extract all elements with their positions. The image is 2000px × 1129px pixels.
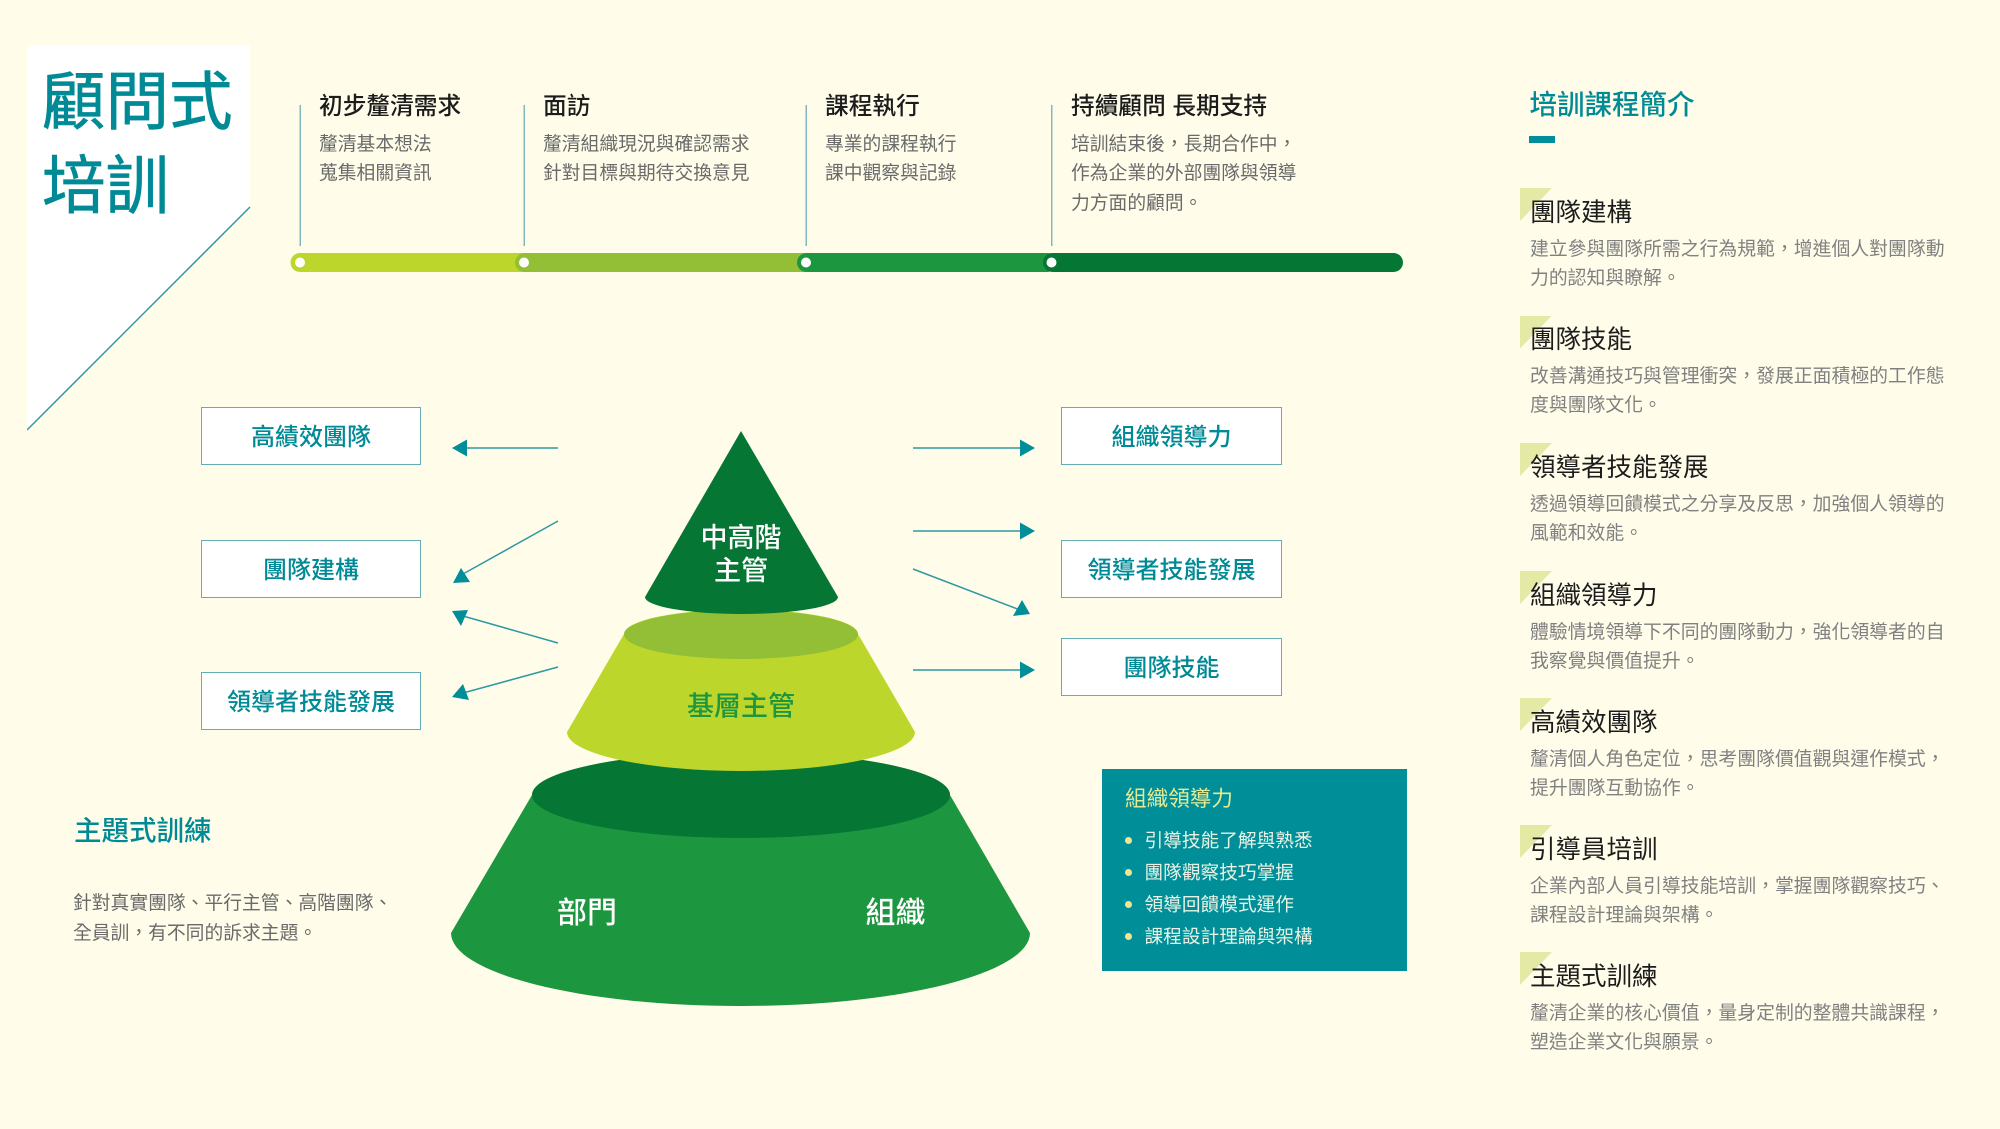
course: 主題式訓練 bbox=[1520, 952, 1945, 1052]
label: 組織: 組織 bbox=[866, 897, 926, 930]
arrow: base to 團隊建構 bbox=[452, 610, 558, 643]
step 3 bbox=[825, 94, 956, 183]
box: 領導者技能發展 right: 領導者技能發展 bbox=[1088, 556, 1256, 584]
course: 引導員培訓 bbox=[1520, 825, 1945, 924]
course: 主題式訓練: 主題式訓練 bbox=[1530, 962, 1658, 990]
step 4: 力方面的顧問。 bbox=[1071, 192, 1202, 212]
course: 引導員培訓: 引導員培訓 bbox=[1530, 836, 1658, 864]
course: 高績效團隊 bbox=[1520, 698, 1945, 798]
course: 組織領導力: 我察覺與價值提升。 bbox=[1530, 650, 1700, 670]
bullet list bbox=[1125, 830, 1313, 946]
heading: 主題式訓練 bbox=[74, 814, 212, 846]
course: 組織領導力 bbox=[1520, 571, 1945, 670]
label: 基層主管: 基層主管 bbox=[687, 692, 795, 722]
course: 領導者技能發展: 透過領導回饋模式之分享及反思，加強個人領導的 bbox=[1530, 492, 1945, 514]
course: 主題式訓練: 塑造企業文化與願景。 bbox=[1530, 1030, 1718, 1052]
box: 高績效團隊 bbox=[201, 407, 421, 465]
step 3: 專業的課程執行 bbox=[825, 132, 956, 154]
course: 團隊技能: 團隊技能 bbox=[1530, 326, 1632, 354]
box: 團隊技能: 團隊技能 bbox=[1124, 655, 1220, 682]
step 4 bbox=[1071, 94, 1296, 212]
description: 全員訓，有不同的訴求主題。 bbox=[73, 922, 317, 943]
label: 部門: 部門 bbox=[557, 897, 617, 930]
box: 團隊技能 bbox=[1061, 638, 1282, 696]
box: 團隊建構 bbox=[201, 540, 421, 598]
step 2: 面訪 bbox=[543, 94, 590, 120]
arrow: to 團隊技能 bbox=[913, 662, 1035, 678]
step 4: 培訓結束後，長期合作中， bbox=[1071, 132, 1296, 154]
title text: 顧問式 bbox=[42, 68, 232, 138]
description: 針對真實團隊、平行主管、高階團隊、 bbox=[73, 892, 392, 913]
title text bbox=[42, 68, 232, 222]
description bbox=[73, 892, 392, 943]
course: 組織領導力: 組織領導力 bbox=[1530, 582, 1658, 610]
course: 引導員培訓: 企業內部人員引導技能培訓，掌握團隊觀察技巧、 bbox=[1530, 874, 1945, 896]
course: 高績效團隊: 高績效團隊 bbox=[1530, 708, 1658, 736]
course: 高績效團隊: 釐清個人角色定位，思考團隊價值觀與運作模式， bbox=[1530, 748, 1945, 768]
arrow: to 高績效團隊 bbox=[452, 440, 558, 456]
course: 領導者技能發展: 領導者技能發展 bbox=[1530, 454, 1709, 482]
course: 團隊建構 bbox=[1520, 188, 1945, 288]
course: 團隊技能: 度與團隊文化。 bbox=[1530, 394, 1662, 415]
course: 主題式訓練: 釐清企業的核心價值，量身定制的整體共識課程， bbox=[1530, 1002, 1945, 1022]
step 2 bbox=[543, 94, 750, 183]
step 1 bbox=[319, 94, 461, 183]
step 4: 作為企業的外部團隊與領導 bbox=[1071, 162, 1296, 183]
pyramid tier: middle bbox=[567, 610, 915, 771]
step 3: 課程執行 bbox=[825, 94, 920, 120]
step 1: 初步釐清需求 bbox=[319, 94, 461, 120]
step 1: 釐清基本想法 bbox=[319, 132, 432, 154]
box: 組織領導力 bbox=[1061, 407, 1282, 465]
box: 高績效團隊: 高績效團隊 bbox=[251, 424, 371, 451]
arrow: to 組織領導力 bbox=[913, 440, 1035, 456]
course: 團隊技能 bbox=[1520, 316, 1945, 415]
course: 團隊建構: 團隊建構 bbox=[1530, 198, 1632, 226]
bullet list: 團隊觀察技巧掌握 bbox=[1144, 862, 1294, 882]
box: 領導者技能發展 bbox=[201, 672, 421, 730]
pyramid tier: base bbox=[451, 752, 1030, 1006]
box: 團隊建構: 團隊建構 bbox=[263, 557, 359, 584]
bullet list: 引導技能了解與熟悉 bbox=[1144, 830, 1313, 850]
bullet list: 領導回饋模式運作 bbox=[1144, 894, 1294, 914]
bullet list: 課程設計理論與架構 bbox=[1144, 926, 1313, 946]
title panel bbox=[27, 45, 250, 430]
step 3: 課中觀察與記錄 bbox=[825, 162, 956, 183]
panel: 組織領導力 detail bbox=[1102, 769, 1407, 971]
course: 團隊建構: 力的認知與瞭解。 bbox=[1530, 266, 1681, 288]
arrow: base to 領導者技能發展 bbox=[452, 667, 558, 700]
course: 引導員培訓: 課程設計理論與架構。 bbox=[1530, 904, 1718, 924]
course: 組織領導力: 體驗情境領導下不同的團隊動力，強化領導者的自 bbox=[1530, 620, 1945, 642]
step 2: 針對目標與期待交換意見 bbox=[543, 162, 750, 183]
arrow: diagonal to 團隊技能 bbox=[913, 569, 1030, 616]
step 2: 釐清組織現況與確認需求 bbox=[543, 132, 750, 154]
panel heading: 組織領導力 bbox=[1125, 786, 1233, 811]
label: 中高階主管: 中高階 bbox=[700, 523, 782, 553]
label: 中高階主管: 主管 bbox=[714, 556, 768, 586]
label: 中高階主管 bbox=[700, 523, 782, 586]
arrow: to 團隊建構 bbox=[453, 521, 558, 583]
themed training text block bbox=[73, 814, 392, 943]
pyramid tier: top cone bbox=[645, 431, 838, 614]
course section heading bbox=[1529, 88, 1694, 143]
arrow: to 領導者技能發展 bbox=[913, 522, 1035, 540]
course: 領導者技能發展 bbox=[1520, 443, 1945, 542]
title text: 培訓 bbox=[42, 152, 169, 222]
step 1: 蒐集相關資訊 bbox=[319, 162, 432, 183]
course: 團隊技能: 改善溝通技巧與管理衝突，發展正面積極的工作態 bbox=[1530, 365, 1945, 386]
box: 組織領導力: 組織領導力 bbox=[1112, 424, 1232, 451]
course: 團隊建構: 建立參與團隊所需之行為規範，增進個人對團隊動 bbox=[1530, 238, 1945, 258]
box: 領導者技能發展 right bbox=[1061, 540, 1282, 598]
box: 領導者技能發展: 領導者技能發展 bbox=[227, 689, 395, 716]
course section heading: 培訓課程簡介 bbox=[1530, 88, 1694, 120]
step 4: 持續顧問 長期支持 bbox=[1071, 94, 1267, 120]
course: 領導者技能發展: 風範和效能。 bbox=[1530, 522, 1643, 542]
course: 高績效團隊: 提升團隊互動協作。 bbox=[1530, 776, 1700, 798]
timeline bbox=[290, 105, 1403, 272]
